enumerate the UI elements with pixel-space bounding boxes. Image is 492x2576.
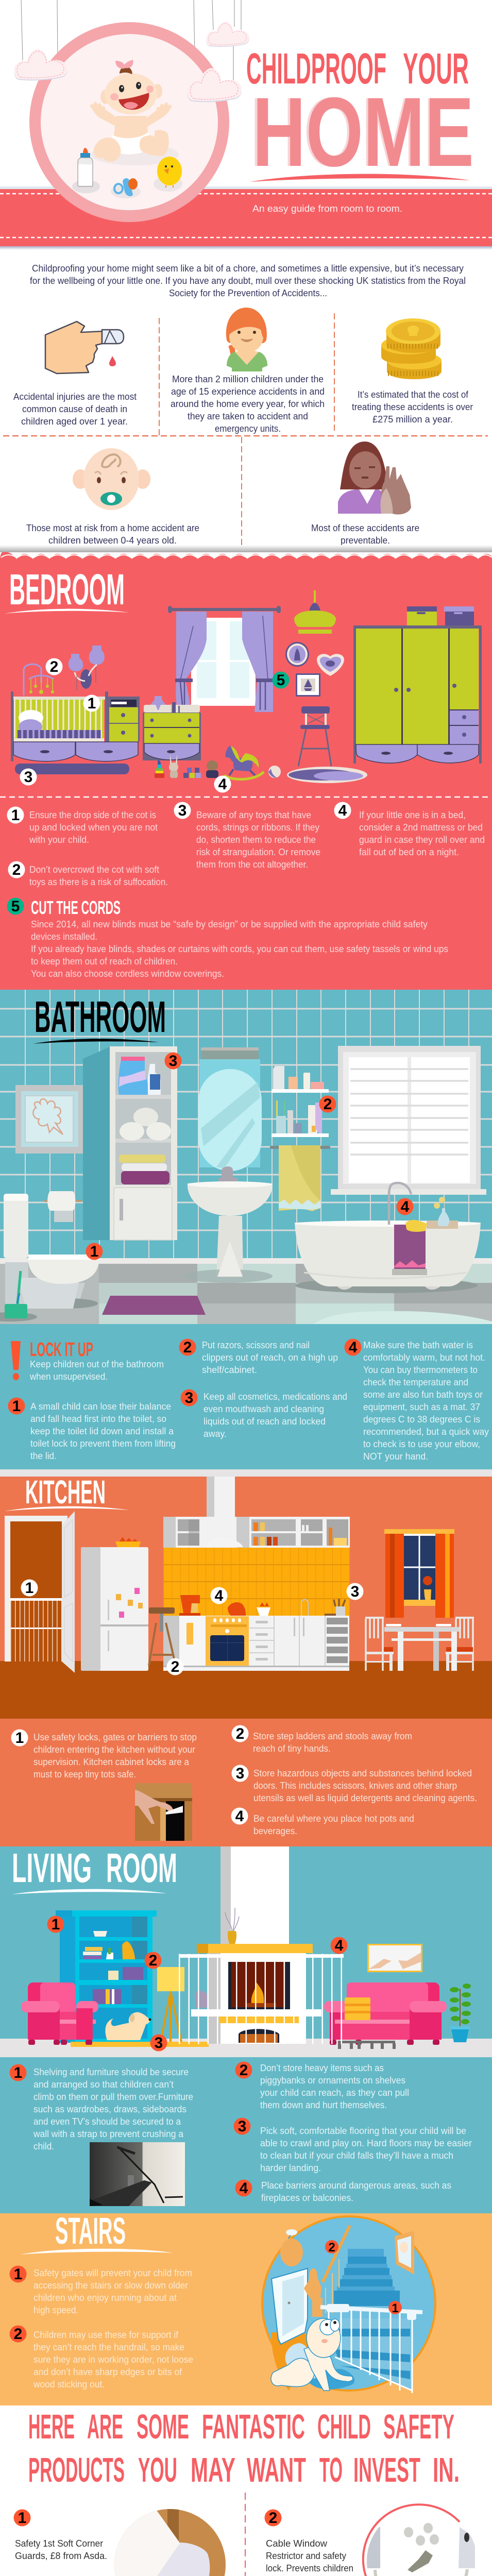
photo: cabinet lock (135, 1783, 192, 1841)
bedroom number badges (20, 658, 290, 793)
bedroom tip 2: toys as there is a risk of suffocation. (29, 876, 168, 887)
text: accidental injuries: Accidental injuries are the most (13, 391, 137, 402)
product 1: corner guards: Safety 1st Soft Corner (15, 2538, 103, 2549)
intro text (30, 263, 466, 298)
kitchen tip 2: 2 (236, 1725, 244, 1742)
toilet (0, 1194, 99, 1321)
bedroom tip 3: them from the cot altogether. (196, 859, 308, 870)
kitchen tip 2: Store step ladders and stools away from (253, 1731, 412, 1741)
kitchen number badges (21, 1580, 364, 1675)
sink (183, 1166, 273, 1283)
living room tip 1: climb on them or pull them over.Furniture (33, 2091, 193, 2102)
toilet roll (44, 1191, 81, 1222)
bedroom tip 3: cords, strings or ribbons. If they (196, 822, 320, 833)
intro text: Society for the Prevention of Accidents... (169, 287, 327, 298)
living room tip 3 (234, 2117, 472, 2173)
clouds (14, 22, 249, 102)
stairs tip 2: 2 (14, 2326, 22, 2343)
kitchen tip 3: doors. This includes scissors, knives and other sharp (253, 1780, 457, 1791)
bedroom tip 4: consider a 2nd mattress or bed (359, 822, 483, 833)
bathroom tip 1: and fall head first into the toilet, so (30, 1413, 166, 1424)
header band (0, 187, 492, 250)
bathroom tip 1: A small child can lose their balance (30, 1401, 171, 1412)
mobile and wall lamp (24, 646, 105, 696)
living room tip 1: wall with a strap to prevent crushing a (33, 2128, 184, 2139)
heading: bathroom (33, 993, 166, 1044)
bathroom tip 2: Put razors, scissors and nail (202, 1340, 310, 1350)
heading: bathroom: BATHROOM (35, 993, 166, 1042)
cot and drawers (11, 691, 140, 774)
icon: injured hand (45, 321, 124, 374)
picture on bathroom wall (15, 1085, 84, 1154)
living room tip 2: 2 (240, 2062, 248, 2079)
bedroom number badges: 2 (50, 658, 58, 675)
heading: kitchen (5, 1473, 129, 1511)
bathroom tip 1: toilet lock to prevent them from lifting (30, 1438, 176, 1449)
bathroom tip 4: check the temperature and (363, 1377, 468, 1387)
living room tip 3: harder landing. (260, 2162, 321, 2173)
stairs tip 2: wood sticking out. (33, 2379, 105, 2389)
panel: living room (0, 1846, 492, 2213)
products heading: TO (319, 2451, 343, 2489)
living room tip 3: Pick soft, comfortable flooring that your child will be (260, 2125, 466, 2136)
tall cabinet (83, 1046, 177, 1240)
kitchen tip 1: children entering the kitchen without your (33, 1744, 195, 1755)
bedroom number badges: 5 (277, 672, 285, 689)
stairs illustration: 2 (328, 2241, 335, 2255)
safety gate (320, 2304, 422, 2393)
text: accidental injuries: children aged over 1 year. (21, 416, 128, 427)
stairs illustration: 1 (392, 2301, 399, 2315)
baby (90, 60, 179, 165)
products heading: IN. (433, 2451, 460, 2489)
kitchen number badges: 1 (25, 1580, 33, 1597)
kitchen number badges: 2 (171, 1658, 179, 1675)
bedroom number badges: 1 (88, 695, 96, 712)
dresser (143, 696, 201, 760)
bathroom text panel (0, 1324, 492, 1477)
products heading: WANT (247, 2451, 306, 2489)
armchair left (21, 1982, 98, 2045)
panel: bathroom wall and floor (0, 990, 492, 1324)
bedroom tip 1 (7, 807, 158, 845)
bedroom tip 3: do, shorten them to reduce the (196, 834, 316, 845)
baby circle illustration (29, 22, 229, 222)
bathroom tip 2 (179, 1338, 338, 1375)
chick (154, 157, 182, 192)
living room tip 2 (235, 2062, 409, 2110)
stairs tip 1: accessing the stairs or slow down older (33, 2280, 188, 2291)
text: cost: It’s estimated that the cost of (358, 389, 469, 400)
stairs tip 2: they can’t reach the handrail, so make (33, 2342, 184, 2352)
bathroom tip 3 (180, 1389, 347, 1439)
product 2: window restrictor: Restrictor and safety (266, 2550, 347, 2561)
bathroom number badges (86, 1052, 413, 1260)
dog (105, 2012, 151, 2040)
bottle (72, 148, 100, 193)
bedroom tip 3: risk of strangulation. Or remove (196, 846, 320, 857)
icon: girl (226, 308, 267, 371)
text: cost: treating these accidents is over (352, 401, 473, 412)
products heading: HERE (28, 2408, 75, 2446)
text: most at risk (26, 522, 199, 546)
bathroom tip 1 (8, 1397, 176, 1461)
bedroom divider (0, 796, 489, 798)
bedroom tip 2: Don’t overcrowd the cot with soft (29, 864, 159, 875)
floor lamp (157, 1967, 184, 2044)
wardrobe and boxes (353, 606, 482, 764)
crawling baby (271, 2318, 354, 2391)
pacifier (111, 178, 141, 198)
statistic dividers (3, 313, 488, 551)
icon: woman with raised hand (338, 442, 411, 515)
product dividers (0, 2493, 492, 2576)
stairs illustration (261, 2215, 436, 2393)
bedroom window and curtains (168, 606, 281, 712)
rug (71, 2042, 209, 2047)
kitchen tip 4: Be careful where you place hot pots and (253, 1813, 414, 1824)
living room tip 1: 1 (14, 2064, 22, 2081)
bedroom tip 4: 4 (338, 802, 347, 819)
newel post (304, 2268, 323, 2317)
pendant lamp (294, 590, 336, 634)
icon: coins (381, 318, 442, 379)
bedroom tip 5: cut the cords: If you already have blinds, shades or curtains with cords, you can cut them, use safety tassels or wind ups (31, 943, 448, 954)
stair steps (323, 2226, 400, 2313)
bedroom tip 5: cut the cords: CUT THE CORDS (31, 897, 121, 918)
photo: TV wall strap (90, 2142, 185, 2206)
heading: stairs: STAIRS (55, 2211, 126, 2252)
living room tip 1 (9, 2064, 193, 2151)
bedroom tip 3: Beware of any toys that have (196, 809, 311, 820)
fireplace safety gate (179, 1954, 344, 1999)
kitchen door and safety gate (5, 1511, 75, 1673)
plant (450, 1984, 471, 2042)
living room tip 3: to clean but if your child falls they’ll have a much (260, 2150, 453, 2161)
stairs tip 2: sure they are in working order, not loose (33, 2354, 193, 2365)
wall picture (367, 1944, 422, 1972)
bathroom tip 3: even mouthwash and cleaning (203, 1403, 324, 1414)
kitchen tip 3: 3 (236, 1765, 244, 1782)
bedroom tip 4: guard in case they roll over and (359, 834, 485, 845)
living room number badges: 2 (149, 1952, 157, 1969)
icon: baby face (73, 448, 150, 510)
living room tip 4: fireplaces or balconies. (261, 2192, 353, 2203)
text: preventable: Most of these accidents are (311, 522, 419, 533)
bathroom tip 3: Keep all cosmetics, medications and (203, 1391, 347, 1402)
framed portrait (395, 2231, 414, 2275)
bedroom tip 3: 3 (178, 802, 186, 819)
bedroom tip 4: fall out of bed on a night. (359, 846, 459, 857)
heading: living room: ROOM (106, 1845, 177, 1891)
hanging strings (21, 0, 241, 82)
bathroom tip 3: liquids out of reach and locked (203, 1416, 326, 1427)
armchair right with cushion (324, 1982, 447, 2049)
living room number badges: 4 (335, 1937, 344, 1954)
kitchen number badges: 4 (215, 1587, 224, 1604)
bedroom tip 1: with your child. (29, 834, 89, 845)
stairs tip 2 (9, 2326, 193, 2389)
bathroom number badges: 2 (324, 1096, 332, 1113)
bedroom tip 5: cut the cords (7, 897, 448, 979)
bar stool (149, 1607, 176, 1666)
bedroom tip 2 (8, 861, 168, 887)
products heading: YOU (138, 2451, 177, 2489)
heading: kitchen: KITCHEN (25, 1473, 106, 1511)
bedroom tip 1: 1 (11, 807, 20, 824)
bathroom tip 4: NOT your hand. (363, 1451, 428, 1462)
kitchen tip 4: 4 (235, 1808, 244, 1825)
living room tip 4: Place barriers around dangerous areas, such as (261, 2180, 451, 2191)
bathroom tip 1: the lid. (30, 1450, 57, 1461)
shelves with toiletries (270, 1066, 330, 1211)
products heading (28, 2408, 460, 2489)
text: 2 million children: emergency units. (215, 423, 281, 434)
bathroom tip 4: You can buy thermometers to (363, 1364, 478, 1375)
dining table and chairs (365, 1617, 474, 1671)
text: most at risk: Those most at risk from a home accident are (26, 522, 199, 533)
product 2: window restrictor: lock. Prevents children (266, 2563, 353, 2573)
living room number badges: 3 (155, 2035, 163, 2052)
text: 2 million children: More than 2 million children under the (172, 374, 324, 384)
products heading: MAY (191, 2451, 235, 2489)
kitchen tip 4 (231, 1807, 414, 1836)
bathroom tip 3: away. (203, 1428, 227, 1439)
bathroom tip 2: 2 (183, 1339, 192, 1356)
bath (295, 1183, 481, 1293)
living room tip 2: them down and hurt themselves. (260, 2099, 387, 2110)
bathroom tip 4: recommended, but a quick way (363, 1426, 489, 1437)
living room tip 3: 3 (238, 2118, 246, 2135)
kitchen tip 4: beverages. (253, 1825, 297, 1836)
living room tip 1: and arranged so that children can’t (33, 2079, 174, 2090)
upper cabinets and hood (163, 1477, 350, 1548)
living room tip 2: Don’t store heavy items such as (260, 2062, 384, 2073)
kitchen number badges: 3 (351, 1583, 359, 1600)
callout: lock it up: Keep children out of the bathroom (30, 1359, 164, 1369)
text: most at risk: children between 0-4 years old. (48, 535, 177, 546)
living room tip 2: your child can reach, as they can pull (260, 2087, 409, 2098)
bathroom tip 1: 1 (12, 1398, 21, 1415)
living room tip 3: able to crawl and play on. Hard floors may be easier (260, 2138, 472, 2148)
stairs tip 1: 1 (14, 2266, 22, 2283)
kitchen base units and oven (163, 1616, 349, 1671)
kitchen tip 2: reach of tiny hands. (253, 1743, 331, 1754)
text: 2 million children (171, 374, 325, 434)
bathroom tip 2: shelf/cabinet. (202, 1364, 257, 1375)
bathroom mat (102, 1296, 206, 1315)
living room number badges: 1 (52, 1916, 60, 1933)
bedroom number badges: 3 (24, 769, 32, 786)
living room tip 4: 4 (240, 2180, 248, 2197)
kitchen tip 1 (11, 1729, 197, 1780)
text: 2 million children: around the home every year, for which (171, 398, 325, 409)
text: cost (352, 389, 473, 425)
products heading: INVEST (353, 2451, 420, 2489)
living room number badges (47, 1916, 347, 2052)
toys and rug (155, 746, 367, 783)
kitchen tip 3 (232, 1765, 477, 1803)
kitchen window (384, 1529, 454, 1618)
bookcase (56, 1910, 157, 2043)
text: accidental injuries (13, 391, 137, 427)
products heading: CHILD (317, 2408, 371, 2446)
bedroom tip 4: If your little one is in a bed, (359, 809, 466, 820)
bedroom tip 5: cut the cords: You can also choose cordless window coverings. (31, 968, 224, 979)
title underline (249, 174, 470, 182)
text: preventable (311, 522, 419, 546)
stool (298, 706, 331, 766)
wall pictures (285, 642, 344, 697)
intro text: Childproofing your home might seem like a bit of a chore, and sometimes a little expensive, but it’s necessary (32, 263, 464, 274)
bathroom tip 4: to check is to use your elbow, (363, 1438, 480, 1449)
product 1: corner guards: Guards, £8 from Asda. (15, 2550, 107, 2561)
stairs tip 2: Children may use these for support if (33, 2329, 179, 2340)
kitchen tip 1: Use safety locks, gates or barriers to stop (33, 1732, 197, 1742)
heading: living room: LIVING (12, 1845, 92, 1891)
bedroom tip 5: cut the cords: devices installed. (31, 931, 97, 942)
kitchen tip 1: must to keep tiny tots safe. (33, 1769, 136, 1780)
stairs tip 1: children who enjoy running about at (33, 2292, 177, 2303)
bedroom tip 3 (174, 802, 320, 870)
bathroom tip 3: 3 (185, 1389, 193, 1406)
stairs tip 2: and don’t have sharp edges or bits of (33, 2366, 182, 2377)
ceiling lamp (289, 2233, 292, 2239)
chimney and fireplace (191, 1846, 321, 2044)
product 1: corner guards (13, 2504, 227, 2576)
text: accidental injuries: common cause of death in (22, 403, 127, 414)
bedroom tip 5: cut the cords: 5 (11, 898, 20, 915)
bedroom tip 5: cut the cords: Since 2014, all new blinds must be “safe by design” or be supplied with the appropriate child safety (31, 919, 428, 929)
mirror (198, 1047, 262, 1171)
bathroom window (331, 1046, 486, 1195)
bedroom tip 1: Ensure the drop side of the cot is (29, 809, 156, 820)
living room tip 1: such as wardrobes, draws, sideboards (33, 2104, 186, 2114)
products heading: SOME (137, 2408, 189, 2446)
panel: kitchen (0, 1477, 492, 1846)
callout: lock it up: when unsupervised. (29, 1371, 108, 1382)
products heading: ARE (87, 2408, 123, 2446)
stairs tip 1 (9, 2266, 192, 2315)
panel: bedroom (0, 545, 492, 990)
heading: bedroom (5, 565, 129, 614)
panel: stairs (0, 2213, 492, 2405)
bathroom tip 2: clippers out of reach, on a high up (202, 1352, 338, 1363)
living room tip 1: Shelving and furniture should be secure (33, 2066, 189, 2077)
stairs tip 1: high speed. (33, 2304, 78, 2315)
bathroom number badges: 1 (90, 1243, 98, 1260)
bedroom tip 2: 2 (12, 861, 21, 878)
heading: bedroom: BEDROOM (9, 565, 125, 614)
door (272, 2268, 308, 2344)
heading: stairs (21, 2211, 174, 2255)
bathroom tip 4: Make sure the bath water is (363, 1340, 473, 1350)
text: preventable: preventable. (341, 535, 390, 546)
product 1: corner guards: 1 (18, 2510, 26, 2527)
kitchen tip 1: supervision. Kitchen cabinet locks are a (33, 1756, 190, 1767)
text: 2 million children: they are taken to accident and (188, 411, 308, 421)
products heading: PRODUCTS (28, 2451, 125, 2489)
bedroom tip 1: up and locked when you are not (29, 822, 158, 833)
callout: lock it up: LOCK IT UP (30, 1339, 93, 1361)
text: 2 million children: age of 15 experience accidents in and (171, 386, 325, 397)
countertop items (179, 1595, 345, 1616)
bathroom number badges: 3 (169, 1053, 177, 1070)
product 2: window restrictor: 2 (269, 2510, 277, 2527)
text: cost: £275 million a year. (372, 414, 453, 425)
bathroom tip 4: equipment, such as a mat. 37 (363, 1401, 480, 1412)
bathroom tip 4 (344, 1338, 489, 1462)
bathroom tip 4: 4 (349, 1339, 358, 1356)
fridge (81, 1537, 148, 1671)
bathroom tip 1: keep the toilet lid down and install a (30, 1426, 174, 1436)
living room tip 1: and even TV’s should be secured to a (33, 2116, 181, 2127)
bedroom number badges: 4 (218, 776, 227, 793)
tagline: An easy guide from room to room. (252, 203, 402, 214)
products heading: FANTASTIC (202, 2408, 305, 2446)
bathroom tip 4: comfortably warm, but not hot. (363, 1352, 485, 1363)
bathroom tip 4: degrees C to 38 degrees C is (363, 1414, 480, 1425)
intro text: for the wellbeing of your little one. If you have any doubt, mull over these shocking UK statistics from the Royal (30, 275, 466, 286)
bedroom tip 4 (334, 802, 485, 857)
stairs tip 1: Safety gates will prevent your child from (33, 2267, 192, 2278)
bathroom tip 4: some are also fun bath toys or (363, 1389, 483, 1400)
kitchen tip 2 (232, 1725, 412, 1754)
product 2: window restrictor: Cable Window (266, 2538, 328, 2549)
kitchen tip 1: 1 (15, 1730, 24, 1747)
bathroom number badges: 4 (401, 1198, 410, 1215)
kitchen tip 3: Store hazardous objects and substances behind locked (253, 1768, 472, 1778)
living room tip 4 (235, 2179, 451, 2203)
bedroom tip 5: cut the cords: to keep them out of reach of children. (31, 956, 178, 967)
living room tip 1: child. (33, 2141, 54, 2151)
kitchen tip 3: utensils as well as liquid detergents and cleaning agents. (253, 1792, 477, 1803)
callout: lock it up (11, 1339, 164, 1382)
kitchen backsplash (163, 1548, 350, 1616)
living room tip 2: piggybanks or ornaments on shelves (260, 2075, 405, 2086)
product 2: window restrictor (265, 2504, 475, 2576)
